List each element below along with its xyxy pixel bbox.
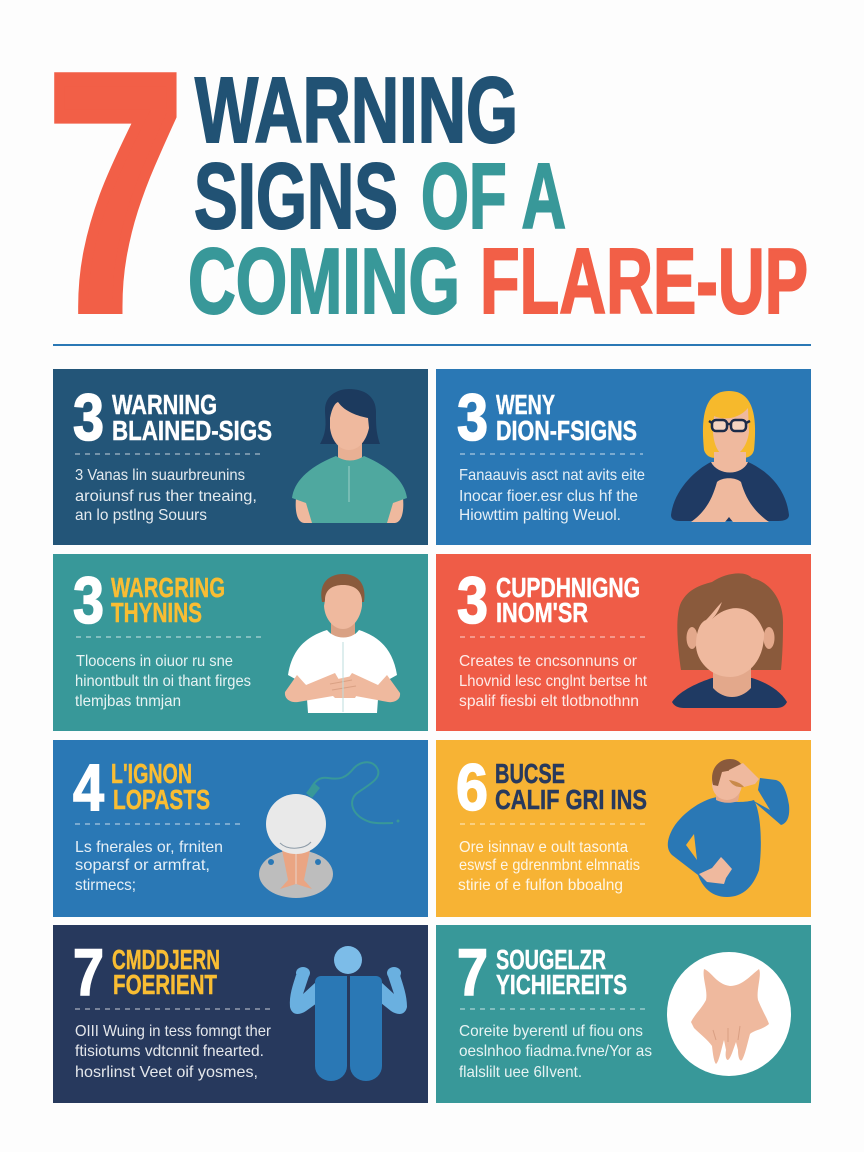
panel: sign 5 blue bbox=[53, 740, 428, 917]
panel: sign 2 teal bbox=[53, 554, 428, 731]
body text: tlemjbas tnmjan bbox=[75, 693, 181, 710]
body text bbox=[459, 467, 645, 524]
number: 3 bbox=[73, 380, 104, 454]
heading: DION-FSIGNS bbox=[496, 415, 637, 446]
body text: Hiowttim palting Weuol. bbox=[459, 507, 621, 524]
body text bbox=[75, 839, 223, 894]
glasses bbox=[709, 420, 750, 431]
panel: sign 6 yellow bbox=[436, 740, 811, 917]
body text: Lhovnid lesc cnglnt bertse ht bbox=[459, 673, 648, 690]
heading bbox=[495, 758, 647, 815]
number: 7 bbox=[457, 935, 488, 1009]
body text: hinontbult tln oi thant firges bbox=[75, 673, 251, 690]
number: 3 bbox=[457, 563, 488, 637]
heading bbox=[112, 389, 272, 446]
heading: SOUGELZR bbox=[496, 944, 606, 975]
title line: COMING FLARE-UP bbox=[188, 229, 808, 333]
body text: OIII Wuing in tess fomngt ther bbox=[75, 1023, 272, 1040]
heading bbox=[496, 389, 637, 446]
body text: ftisiotums vdtcnnit fnearted. bbox=[75, 1043, 264, 1060]
heading: YICHIEREITS bbox=[496, 969, 627, 1000]
heading: BLAINED-SIGS bbox=[112, 415, 272, 446]
title line: COMING FLARE-UP: COMING bbox=[188, 229, 460, 333]
body text: Ore isinnav e oult tasonta bbox=[459, 839, 628, 856]
body text bbox=[75, 467, 257, 524]
icon: woman in teal shirt bbox=[292, 389, 407, 523]
panel: sign 7 dark navy bbox=[53, 925, 428, 1103]
body text bbox=[459, 1023, 652, 1081]
body text: aroiunsf rus ther tneaing, bbox=[75, 488, 257, 505]
icon: man in white shirt bbox=[285, 574, 400, 713]
heading: L'IGNON bbox=[111, 758, 192, 789]
title line: WARNING: WARNING bbox=[195, 58, 518, 162]
body text: soparsf or armfrat, bbox=[75, 857, 210, 874]
body text: Ls fnerales or, frniten bbox=[75, 839, 223, 856]
heading: THYNINS bbox=[111, 597, 202, 628]
number: 6 bbox=[456, 750, 488, 824]
body text bbox=[459, 653, 648, 710]
body text: spalif fiesbi elt tlotbnothnn bbox=[459, 693, 639, 710]
body text: Fanaauvis asct nat avits eite bbox=[459, 467, 645, 484]
heading bbox=[496, 572, 640, 628]
body text: an lo pstlng Souurs bbox=[75, 507, 207, 524]
big numeral 7: 7 bbox=[49, 8, 182, 378]
heading: BUCSE bbox=[495, 758, 565, 789]
number: 4 bbox=[73, 750, 104, 824]
heading bbox=[111, 572, 225, 628]
body text: flalslilt uee 6lIvent. bbox=[459, 1064, 582, 1081]
heading: WARNING bbox=[112, 389, 217, 420]
heading: LOPASTS bbox=[113, 784, 210, 815]
icon: blue figure with raised hands bbox=[290, 946, 407, 1081]
heading: CALIF GRI INS bbox=[495, 784, 647, 815]
icon: woman with brown hair bbox=[672, 573, 787, 708]
title line: SIGNS OF A: SIGNS bbox=[194, 144, 398, 248]
icon: woman with glasses bbox=[671, 391, 789, 522]
body text: hosrlinst Veet oif yosmes, bbox=[75, 1064, 258, 1081]
body text: stirmecs; bbox=[75, 877, 136, 894]
panel: sign 4 coral bbox=[436, 554, 811, 731]
body text: Coreite byerentl uf fiou ons bbox=[459, 1023, 643, 1040]
icon: man holding head and stomach bbox=[668, 759, 789, 897]
body text bbox=[458, 839, 640, 894]
heading: INOM'SR bbox=[496, 597, 588, 628]
icon: hand in white circle bbox=[667, 952, 791, 1076]
heading: CUPDHNIGNG bbox=[496, 572, 640, 603]
heading: CMDDJERN bbox=[112, 944, 220, 975]
title bbox=[49, 8, 808, 378]
panel: sign 3 blue bbox=[436, 369, 811, 545]
heading: FOERIENT bbox=[113, 969, 217, 1000]
body text: 3 Vanas lin suaurbreunins bbox=[75, 467, 245, 484]
heading bbox=[112, 944, 220, 1000]
panel: sign 1 navy bbox=[53, 369, 428, 545]
panel: sign 8 teal bbox=[436, 925, 811, 1103]
body text: oeslnhoo fiadma.fvne/Yor as bbox=[459, 1043, 652, 1060]
heading bbox=[111, 758, 210, 815]
number: 3 bbox=[73, 563, 104, 637]
body text bbox=[75, 1023, 272, 1081]
number: 3 bbox=[457, 380, 488, 454]
title line: SIGNS OF A: OF A bbox=[421, 144, 566, 248]
body text: Tloocens in oiuor ru sne bbox=[76, 653, 233, 670]
body text: Creates te cncsonnuns or bbox=[459, 653, 638, 670]
body text: stirie of e fulfon bboalng bbox=[458, 877, 623, 894]
icon: figure with round white head and cable bbox=[259, 762, 400, 898]
body text: eswsf e gdrenmbnt elmnatis bbox=[459, 857, 640, 874]
heading: WARGRING bbox=[111, 572, 225, 603]
number: 7 bbox=[73, 935, 104, 1009]
body text: Inocar fioer.esr clus hf the bbox=[459, 488, 638, 505]
heading bbox=[496, 944, 627, 1000]
heading: WENY bbox=[496, 389, 555, 420]
body text bbox=[75, 653, 251, 710]
